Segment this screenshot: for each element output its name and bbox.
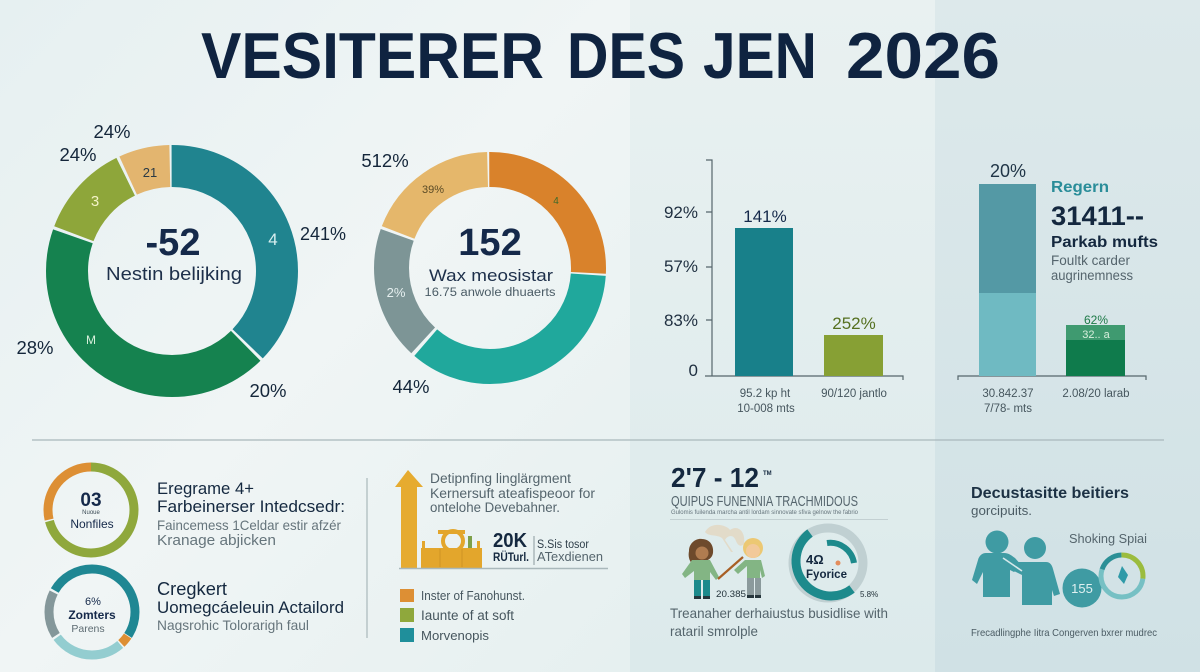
title — [201, 19, 1000, 92]
ring: Fyorice: 4Ω — [806, 552, 824, 567]
stat block: small ring one: Farbeinerser Intedcsedr: — [157, 497, 345, 516]
text block: caption centre: Treanaher derhaiustus busidlise with — [670, 605, 888, 621]
bar chart: right: 62% — [1084, 313, 1108, 327]
title: JEN — [703, 19, 817, 92]
heading: right panel — [971, 485, 1129, 518]
stat: 20K: ATexdienen — [537, 550, 603, 564]
bar chart: left: 141% — [743, 207, 787, 226]
vertical divider — [366, 478, 368, 638]
text block: development note: Detipnfing linglärgment — [430, 471, 571, 486]
ring: Fyorice: 5.8% — [860, 590, 878, 599]
stat block: small ring two: Nagsrohic Tolorarigh faul — [157, 617, 309, 633]
donut chart: left: 21 — [143, 165, 157, 180]
stat block: small ring two: Parens — [71, 623, 105, 635]
icon: rising arrow — [395, 470, 423, 568]
stat block: small ring two: Uomegcáeleuin Actailord — [157, 598, 344, 617]
heading: 27-12: QUIPUS FUNENNIA TRACHMIDOUS — [671, 493, 858, 510]
callout: regional figures: Parkab mufts — [1051, 234, 1158, 251]
title: VESITERER — [201, 19, 544, 92]
mini ring icon — [1101, 555, 1143, 597]
stat block: small ring one: Nuoue — [82, 510, 100, 516]
callout: regional figures: Regern — [1051, 179, 1109, 196]
heading: 27-12: TM — [763, 471, 772, 477]
donut chart: left: 24% — [93, 121, 131, 142]
callout: regional figures — [1051, 179, 1158, 283]
legend: Inster of Fanohunst. — [421, 588, 525, 603]
illustration: two figures with smoke — [682, 525, 765, 599]
bar chart: left: 0 — [689, 361, 698, 380]
stat: 20K: 20K — [493, 530, 528, 552]
donut chart: right: 2% — [387, 285, 406, 300]
stat block: small ring one: 03 — [80, 490, 102, 511]
bar chart: right: 2.08/20 larab — [1062, 388, 1130, 400]
stat block: small ring one: Faincemess 1Celdar estir afzér — [157, 517, 341, 533]
stat block: small ring one — [48, 467, 345, 553]
text block: development note: Kernersuft ateafispeoor for — [430, 486, 596, 501]
bar chart: left: 92% — [664, 203, 698, 222]
donut chart: right: 4 — [553, 196, 559, 207]
callout: regional figures: augrinemness — [1051, 268, 1133, 283]
stat: 20K: S.Sis tosor — [537, 539, 589, 551]
stat block: small ring one: Nonfiles — [70, 517, 114, 531]
legend — [400, 588, 525, 643]
title: 2026 — [846, 19, 1000, 92]
donut chart: right: 512% — [361, 150, 409, 171]
donut chart: left: 4 — [268, 230, 278, 249]
heading: 27-12: Gulomis fuilenda marcha antil lordam sinnovate sfiva gelnow the fabrio — [671, 510, 859, 516]
donut chart: left: M — [86, 333, 96, 347]
heading: 27-12: 2'7 - 12 — [671, 462, 759, 493]
ring: Fyorice — [793, 528, 878, 599]
donut chart: right: 16.75 anwole dhuaerts — [424, 287, 556, 299]
badge: 155 — [1062, 568, 1102, 608]
bar chart: left: 83% — [664, 311, 698, 330]
donut chart: right: 44% — [392, 376, 430, 397]
callout: regional figures: Foultk carder — [1051, 253, 1131, 268]
bar chart: right: 30.842.37 — [982, 388, 1034, 400]
legend: Morvenopis — [421, 628, 489, 643]
text block: caption centre — [670, 605, 888, 639]
stat: 20K — [493, 530, 603, 565]
bar chart: left — [664, 160, 903, 415]
bar chart: left: 252% — [832, 314, 876, 333]
baseline rule — [399, 568, 608, 570]
stat block: small ring two: Zomters — [68, 608, 116, 622]
illustration: two figures with smoke: 20.385 — [716, 589, 746, 599]
donut chart: right: Wax meosistar — [429, 266, 553, 285]
bar chart: right — [958, 161, 1146, 415]
donut chart: right — [361, 150, 588, 397]
heading: right panel: gorcipuits. — [971, 503, 1032, 518]
donut chart: right: 39% — [422, 184, 444, 196]
donut chart: left: 3 — [91, 193, 99, 210]
stat block: small ring one: Eregrame 4+ — [157, 479, 254, 498]
donut chart: left: 20% — [249, 380, 287, 401]
stat block: small ring one: Kranage abjicken — [157, 533, 276, 549]
stat: 20K: RÜTurl. — [493, 549, 529, 564]
text block: development note — [430, 471, 596, 515]
title: DES — [567, 19, 685, 92]
donut chart: left: 28% — [16, 337, 54, 358]
ring: Fyorice: Fyorice — [806, 569, 847, 581]
text block: development note: ontelohe Devebahner. — [430, 500, 560, 515]
donut chart: left: -52 — [146, 222, 200, 264]
stat block: small ring two: Cregkert — [157, 579, 227, 599]
heading: right panel: Decustasitte beitiers — [971, 485, 1129, 502]
donut chart: left: 24% — [59, 144, 97, 165]
bar chart: right: 32.. a — [1082, 329, 1111, 341]
bar chart: left: 95.2 kp ht — [740, 388, 791, 400]
badge: 155: 155 — [1071, 581, 1093, 596]
bar chart: right: 7/78- mts — [984, 403, 1032, 415]
bar chart: left: 10-008 mts — [737, 403, 795, 415]
stat block: small ring two: 6% — [85, 596, 101, 608]
donut chart: left — [16, 121, 346, 401]
donut chart: right: 152 — [458, 222, 522, 264]
bar chart: right: 20% — [990, 161, 1026, 181]
text block: footer note right: Frecadlingphe Iitra Congerven bxrer mudrec — [971, 627, 1157, 639]
bar chart: left: 90/120 jantlo — [821, 388, 887, 400]
bar chart: left: 57% — [664, 257, 698, 276]
donut chart: left: 241% — [300, 224, 346, 244]
stat block: small ring two — [49, 569, 344, 655]
callout: regional figures: 31411-- — [1051, 201, 1144, 231]
section divider — [32, 439, 1164, 441]
icon: building — [421, 530, 482, 568]
legend: Iaunte of at soft — [421, 608, 514, 623]
donut chart: left: Nestin belijking — [106, 264, 242, 284]
text block: caption centre: rataril smrolple — [670, 623, 758, 639]
icon: two people — [972, 530, 1060, 605]
heading: 27-12 — [670, 462, 888, 520]
label: Shoking Spiai: Shoking Spiai — [1069, 532, 1147, 546]
